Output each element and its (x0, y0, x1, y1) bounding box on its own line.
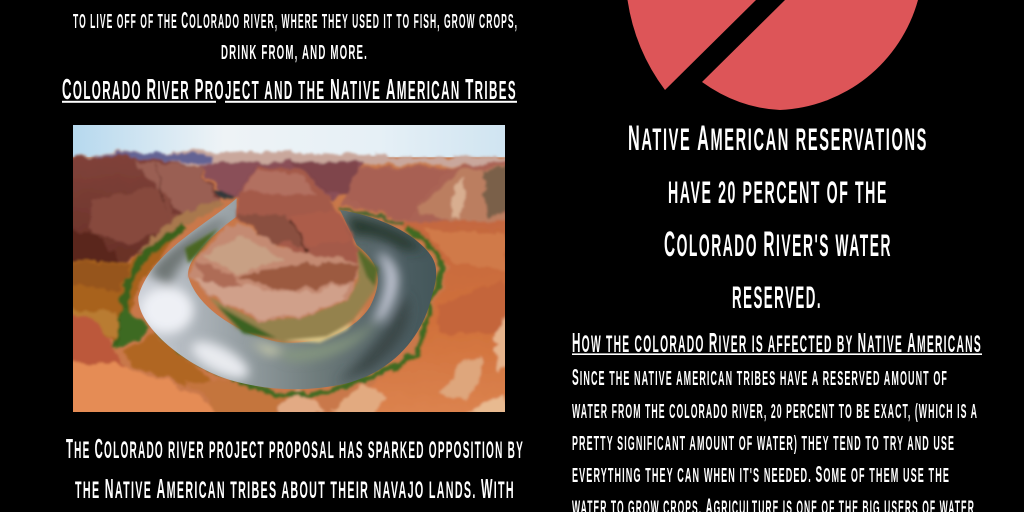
left orange slope (60, 227, 183, 347)
left cliff (60, 156, 220, 263)
bottom right rocks (443, 355, 483, 400)
right cliffs (340, 160, 505, 224)
photo: Horseshoe Bend canyon (60, 120, 517, 420)
far canyon wall (197, 162, 363, 200)
sky (73, 125, 505, 158)
distant mesas (60, 152, 517, 165)
butte (188, 220, 359, 321)
heading: Colorado River Project: COLORADO RIVER PROJECT AND THE NATIVE AMERICAN TRIBES (62, 74, 517, 106)
right lower slope (333, 219, 505, 412)
paragraph: how the river is affected (572, 364, 978, 512)
paragraph: Colorado river project opposition (66, 433, 524, 504)
paragraph: top intro text: DRINK FROM, AND MORE. (221, 41, 368, 64)
foreground-left rocks (60, 310, 127, 368)
text: TO LIVE OFF OF THE COLORADO RIVER, WHERE THEY USED IT TO FISH, GROW CROPS, (73, 7, 518, 33)
shore of the bend (208, 245, 378, 343)
paragraph: top intro text (73, 7, 518, 64)
paragraph: Colorado river project opposition: THE NATIVE AMERICAN TRIBES ABOUT THEIR NAVAJO LANDS. WITH (75, 473, 515, 504)
statistic: 20 percent reserved: RESERVED. (732, 279, 822, 315)
icon: red circle with diagonal slash (628, 0, 918, 110)
outer green bank (117, 227, 185, 347)
statistic: 20 percent reserved (628, 119, 928, 315)
river (138, 198, 436, 390)
